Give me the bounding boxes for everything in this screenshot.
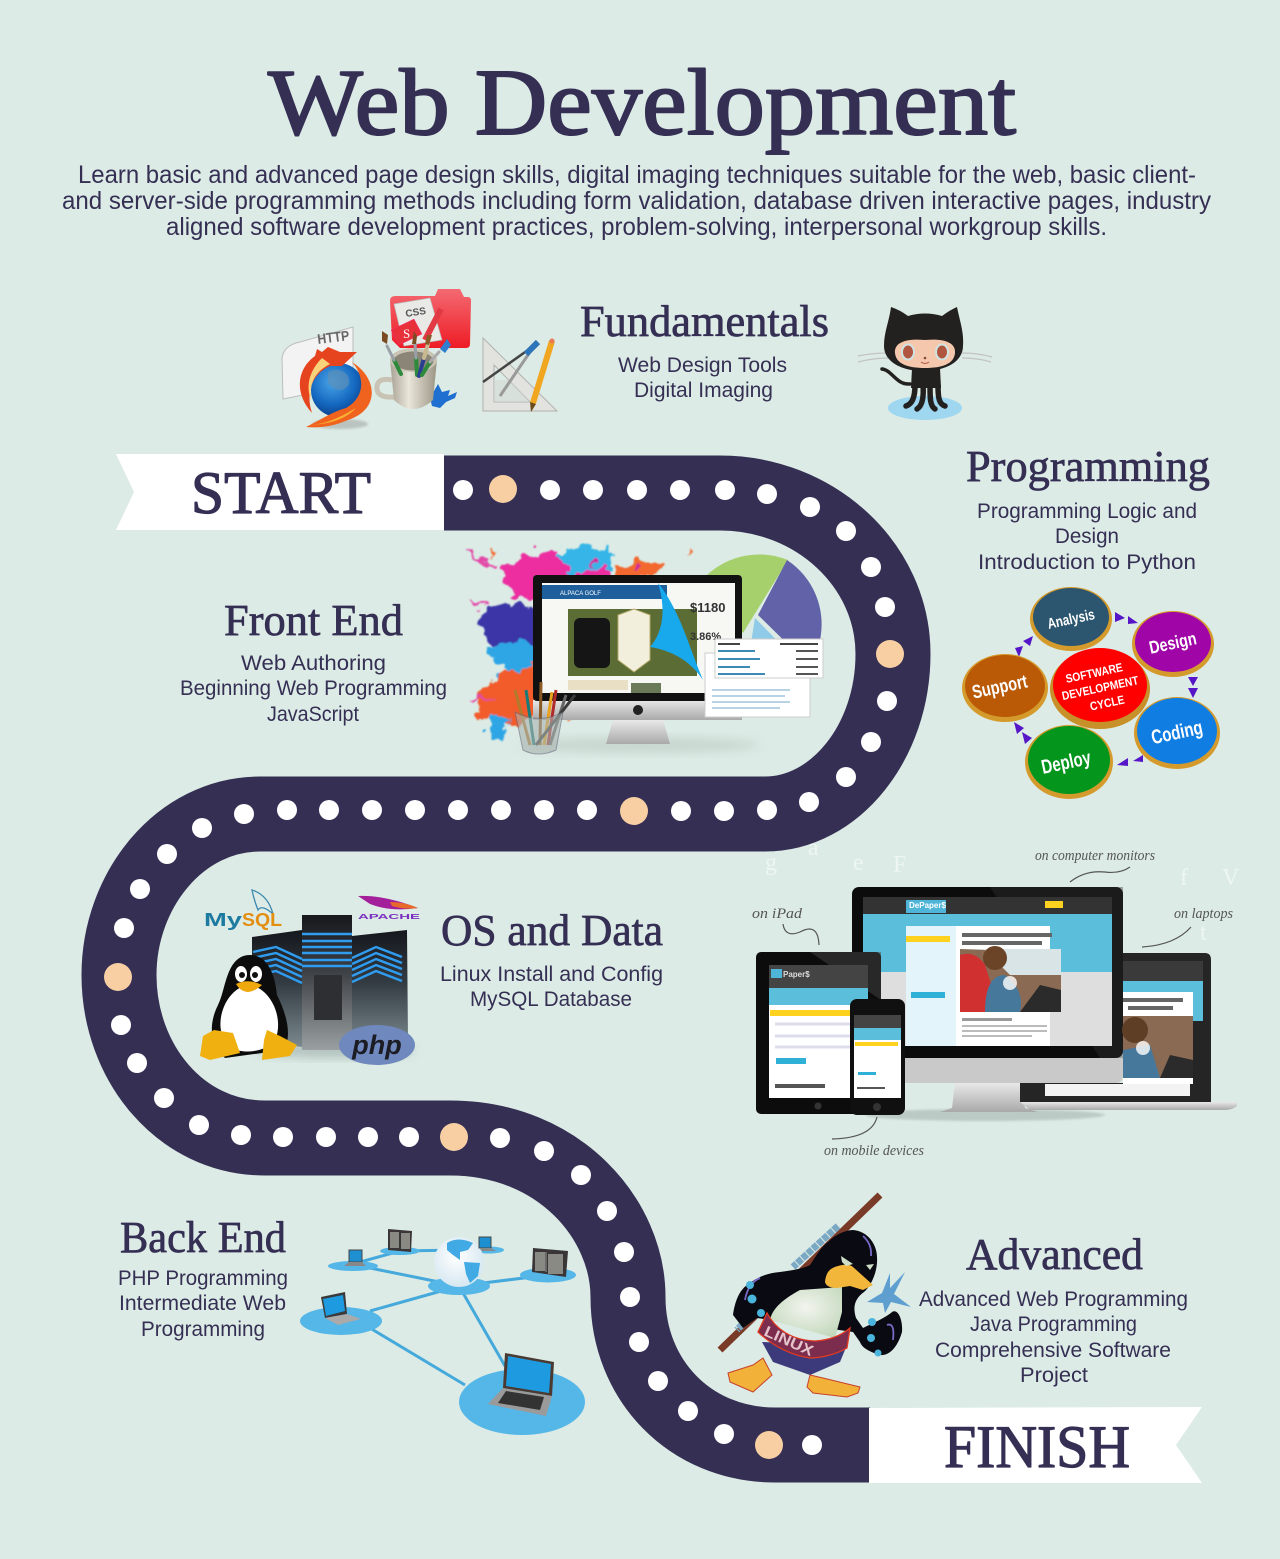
panel: fundamentals text [580, 297, 829, 402]
intro paragraph: Learn basic and advanced page design skills, digital imaging techniques suitable for the web, basic client- [78, 161, 1196, 189]
handwritten note: on ipad [752, 906, 819, 945]
node: design [1132, 611, 1214, 677]
panel: back end text: Intermediate Web [119, 1292, 286, 1315]
illustration: desktop monitor: $1180 [690, 600, 725, 615]
road dots [111, 480, 897, 1455]
panel: advanced text: Java Programming [970, 1313, 1137, 1336]
node: centre: SOFTWARE [1064, 660, 1124, 686]
illustration: desktop monitor: ALPACA GOLF [560, 591, 601, 597]
icon: http file and firefox globe [282, 327, 372, 429]
icon: mysql logo [204, 890, 282, 930]
laptop: small left [344, 1250, 366, 1266]
panel: advanced text: Project [1020, 1364, 1088, 1387]
illustration: desktop monitor [520, 575, 760, 753]
illustration: ninja penguin: LINUX [761, 1323, 816, 1360]
icon: octocat [858, 307, 992, 420]
device: phone [850, 999, 905, 1115]
handwritten note: on laptops [1142, 906, 1233, 947]
illustration: paint splash [466, 544, 690, 738]
illustration: network diagram [300, 1229, 585, 1435]
panel: programming text: Introduction to Python [978, 551, 1196, 574]
finish banner: FINISH [944, 1414, 1130, 1480]
device: desktop monitor: DePaper$ [909, 901, 946, 910]
globe [434, 1237, 484, 1287]
icon: mug with brushes [377, 331, 451, 409]
faint floating letters: F [893, 852, 906, 878]
intro paragraph [62, 161, 1211, 241]
cycle arrows [1014, 612, 1198, 766]
intro paragraph: and server-side programming methods including form validation, database driven interactive pages, industry [62, 187, 1211, 215]
icon: http file and firefox globe: HTTP [316, 327, 350, 347]
icon: drafting tools [483, 338, 557, 412]
node: deploy: Deploy [1039, 747, 1094, 779]
panel: back end text: Back End [120, 1213, 286, 1262]
feet [728, 1358, 772, 1392]
device: desktop monitor [852, 887, 1123, 1121]
body silhouette [733, 1230, 902, 1355]
node: coding [1134, 697, 1220, 769]
panel: os and data text: OS and Data [441, 906, 663, 955]
panel: back end text [118, 1213, 288, 1341]
laptop: large [488, 1353, 554, 1416]
beak [825, 1265, 873, 1290]
laptop: left [321, 1292, 361, 1325]
panel: advanced text [919, 1230, 1188, 1387]
panel: front end text: Front End [224, 596, 403, 645]
legs [762, 1342, 847, 1375]
panel: front end text: Web Authoring [241, 652, 386, 675]
faint floating letters [765, 835, 1240, 946]
icon: red css folder [390, 289, 471, 348]
icon: blue paint splash [430, 384, 457, 408]
start banner [116, 454, 444, 530]
panel: os and data text: Linux Install and Config [440, 963, 663, 986]
panel: programming text: Programming Logic and [977, 500, 1197, 523]
shuriken [867, 1272, 911, 1313]
icon: php badge [339, 1025, 415, 1065]
icon: mysql logo: My [204, 910, 242, 930]
panel: advanced text: Comprehensive Software [935, 1339, 1171, 1362]
illustration: report tables [705, 639, 823, 717]
illustration: ninja penguin [720, 1195, 911, 1397]
panel: fundamentals text: Fundamentals [580, 297, 829, 346]
start banner: START [191, 460, 371, 526]
faint floating letters: f [1180, 865, 1188, 891]
faint floating letters: V [1222, 865, 1240, 891]
node: centre: CYCLE [1089, 693, 1126, 714]
studs [746, 1281, 882, 1356]
handwritten note: on computer monitors [1035, 848, 1155, 882]
panel: os and data text [440, 906, 663, 1011]
device: laptop [1020, 953, 1237, 1110]
panel: programming text: Programming [966, 442, 1210, 491]
handwritten note: on laptops: on laptops [1174, 906, 1233, 922]
panel: fundamentals text: Digital Imaging [634, 379, 773, 402]
staff [720, 1195, 880, 1350]
handwritten note: on computer monitors: on computer monitors [1035, 848, 1155, 864]
faint floating letters: g [765, 850, 777, 876]
node: analysis: Analysis [1046, 606, 1096, 633]
device: tablet: Paper$ [783, 970, 810, 979]
handwritten note: on mobile devices [824, 1117, 924, 1159]
server: top [388, 1229, 412, 1252]
network links [353, 1250, 548, 1385]
node: design: Design [1147, 628, 1198, 658]
chart: software development cycle [962, 587, 1220, 799]
node: analysis [1030, 587, 1112, 651]
icon: apache logo: APACHE [358, 914, 421, 921]
faint floating letters: a [808, 835, 819, 861]
server: right [532, 1248, 568, 1277]
illustration: desktop monitor: 3.86% [690, 631, 721, 643]
road milestones [104, 475, 904, 1459]
panel: advanced text: Advanced [966, 1230, 1143, 1279]
faint floating letters: t [1200, 920, 1207, 946]
sash [758, 1313, 850, 1358]
icon: apache logo [358, 896, 421, 921]
illustration: pen cup [515, 682, 575, 754]
panel: programming text: Design [1055, 525, 1119, 548]
handwritten note: on mobile devices: on mobile devices [824, 1143, 924, 1159]
panel: back end text: Programming [141, 1318, 265, 1341]
faint floating letters: e [853, 850, 864, 876]
panel: advanced text: Advanced Web Programming [919, 1288, 1188, 1311]
node: support: Support [970, 671, 1030, 704]
eyes [841, 1256, 874, 1270]
handwritten note: on ipad: on iPad [752, 906, 803, 922]
belly [770, 1287, 842, 1338]
panel: fundamentals text: Web Design Tools [618, 354, 787, 377]
icon: tux penguin [200, 955, 297, 1060]
node: deploy [1025, 725, 1113, 799]
device: tablet [756, 952, 881, 1114]
icon: mysql logo: SQL [242, 910, 282, 930]
panel: back end text: PHP Programming [118, 1267, 288, 1290]
icon: php badge: php [351, 1030, 402, 1060]
panel: front end text [180, 596, 447, 726]
icon: red css folder: CSS [405, 306, 427, 320]
illustration: responsive devices [752, 835, 1240, 1159]
node: centre: DEVELOPMENT [1061, 673, 1140, 703]
laptop: small right [479, 1237, 496, 1251]
panel: programming text [966, 442, 1210, 574]
title: Web Development [268, 51, 1016, 155]
panel: os and data text: MySQL Database [470, 988, 632, 1011]
intro paragraph: aligned software development practices, problem-solving, interpersonal workgroup skills. [166, 213, 1107, 241]
panel: front end text: JavaScript [267, 703, 359, 726]
node: coding: Coding [1149, 717, 1205, 749]
finish banner [869, 1407, 1202, 1483]
node: centre [1050, 648, 1150, 729]
node: support [962, 654, 1048, 722]
panel: front end text: Beginning Web Programming [180, 677, 447, 700]
discs [300, 1246, 585, 1435]
icon: red css folder: S [403, 326, 410, 341]
purple highlights [745, 1236, 893, 1340]
icon: server towers [252, 915, 415, 1058]
illustration: pie chart [707, 554, 822, 680]
winding road path [119, 493, 893, 1445]
